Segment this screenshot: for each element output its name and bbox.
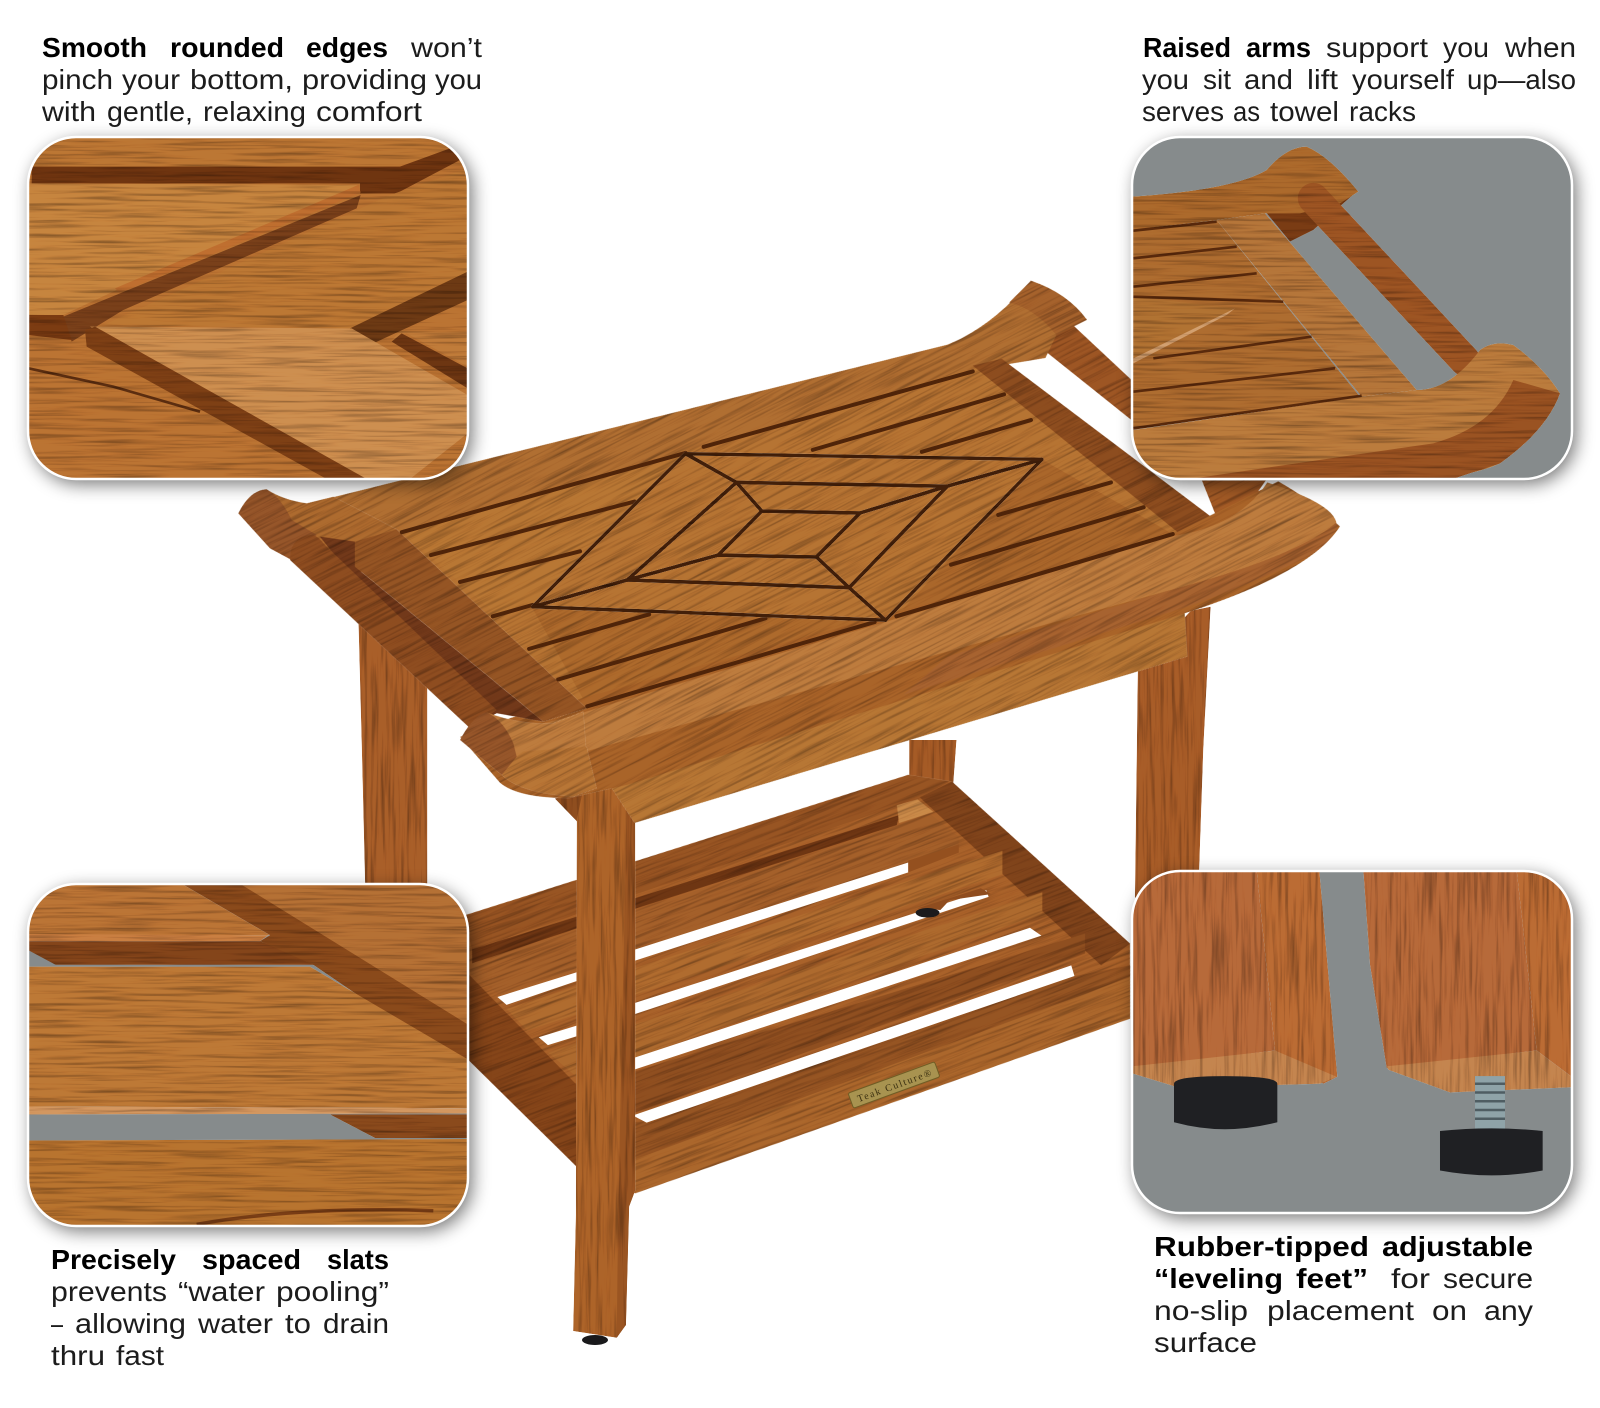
- panel: leveling feet close-up: [1132, 870, 1576, 1218]
- panel: spaced slats close-up: [28, 884, 472, 1231]
- text: precisely spaced slats: spaced: [202, 1244, 301, 1275]
- panel border: [1132, 871, 1572, 1213]
- right rubber foot: [1440, 1128, 1543, 1175]
- text: precisely spaced slats: “water: [178, 1276, 265, 1307]
- text: raised arms: towel: [1270, 96, 1339, 127]
- text: rubber-tipped feet: “leveling: [1154, 1263, 1283, 1294]
- text: smooth rounded edges: rounded: [170, 32, 284, 63]
- feet detail: [1132, 870, 1572, 1213]
- text: raised arms: lift: [1307, 64, 1338, 95]
- text: smooth rounded edges: edges: [306, 32, 388, 63]
- text: rubber-tipped feet: secure: [1443, 1263, 1533, 1294]
- arm detail: [1132, 137, 1572, 480]
- text: rubber-tipped feet: surface: [1154, 1327, 1257, 1358]
- panel shadow: [1136, 876, 1576, 1218]
- lower slatted shelf: [323, 552, 1270, 1408]
- text: precisely spaced slats: fast: [116, 1340, 164, 1371]
- text: raised arms: you: [1142, 64, 1189, 95]
- slat grooves: [402, 371, 1173, 706]
- front rail outer face: [460, 481, 1340, 798]
- panel: rounded edges close-up: [28, 137, 472, 484]
- text: smooth rounded edges: won’t: [410, 32, 482, 63]
- text: rubber-tipped feet: on: [1432, 1295, 1467, 1326]
- text: rubber-tipped feet: any: [1484, 1295, 1533, 1326]
- panel border: [1132, 137, 1572, 479]
- text: precisely spaced slats: pooling”: [276, 1276, 389, 1307]
- panel shadow: [32, 889, 472, 1231]
- front left arm end: [487, 712, 587, 763]
- bench legs: [358, 607, 1211, 898]
- text: precisely spaced slats: thru: [51, 1340, 105, 1371]
- slat detail: [28, 884, 468, 1227]
- text: precisely spaced slats: to: [285, 1308, 311, 1339]
- text: smooth rounded edges: providing: [302, 64, 427, 95]
- front foot: [582, 1335, 608, 1345]
- text: smooth rounded edges: comfort: [316, 96, 422, 127]
- panel shadow: [32, 142, 472, 484]
- text: precisely spaced slats: water: [197, 1308, 273, 1339]
- text: smooth rounded edges: your: [122, 64, 180, 95]
- back towel rod: [1042, 320, 1133, 421]
- panel shadow: [1136, 142, 1576, 484]
- text: raised arms: up—also: [1467, 64, 1576, 95]
- text: smooth rounded edges: pinch: [42, 64, 113, 95]
- slat field: [355, 366, 1202, 722]
- text: precisely spaced slats: –: [51, 1308, 63, 1339]
- text: rubber-tipped feet: placement: [1267, 1295, 1414, 1326]
- grey corner: [28, 950, 56, 965]
- text: smooth rounded edges: relaxing: [203, 96, 306, 127]
- shelf gaps: [497, 863, 1074, 1123]
- text: raised arms: as: [1233, 96, 1260, 127]
- left back arm: [238, 489, 397, 580]
- text: raised arms: Raised: [1143, 32, 1231, 63]
- right frame: [973, 359, 1216, 534]
- front rail top face: [511, 482, 1336, 768]
- back rail: [311, 281, 1087, 546]
- apron: [598, 595, 1187, 823]
- front leg: [555, 782, 635, 1338]
- threaded bolt: [1475, 1076, 1505, 1129]
- text: precisely spaced slats: allowing: [75, 1308, 186, 1339]
- text: smooth rounded edges: gentle,: [107, 96, 193, 127]
- panel border: [28, 137, 468, 479]
- text: raised arms: when: [1504, 32, 1576, 63]
- text: raised arms: sit: [1203, 64, 1231, 95]
- text: raised arms: you: [1443, 32, 1489, 63]
- wood detail: [28, 137, 468, 481]
- left frame: [355, 529, 587, 722]
- panel: raised arms close-up: [1132, 137, 1576, 484]
- text: precisely spaced slats: slats: [327, 1244, 389, 1275]
- text: rubber-tipped feet: for: [1391, 1263, 1430, 1294]
- left rod: [290, 535, 497, 728]
- text: precisely spaced slats: Precisely: [51, 1244, 176, 1275]
- text: precisely spaced slats: prevents: [51, 1276, 167, 1307]
- channel between rod and frame: [320, 537, 543, 728]
- text: rubber-tipped feet: Rubber-tipped: [1154, 1231, 1369, 1262]
- text: raised arms: racks: [1349, 96, 1416, 127]
- panel border: [28, 884, 468, 1226]
- text: rubber-tipped feet: adjustable: [1382, 1231, 1533, 1262]
- text: rubber-tipped feet: no-slip: [1154, 1295, 1248, 1326]
- text: smooth rounded edges: you: [435, 64, 482, 95]
- text: raised arms: and: [1244, 64, 1293, 95]
- text: precisely spaced slats: drain: [323, 1308, 389, 1339]
- rear leg stub seen through the slats: [908, 845, 991, 917]
- text: raised arms: yourself: [1352, 64, 1454, 95]
- text: smooth rounded edges: bottom,: [190, 64, 293, 95]
- text: raised arms: arms: [1246, 32, 1311, 63]
- text: smooth rounded edges: Smooth: [42, 32, 147, 63]
- left end of seat: [114, 344, 721, 942]
- brass plaque: [848, 1062, 940, 1108]
- diamond inlay: [533, 454, 1042, 620]
- text: raised arms: serves: [1142, 96, 1224, 127]
- text: smooth rounded edges: with: [41, 96, 96, 127]
- text: rubber-tipped feet: feet”: [1296, 1263, 1368, 1294]
- text: raised arms: support: [1326, 32, 1428, 63]
- left rubber foot: [1174, 1076, 1277, 1129]
- brass plaque: Teak Culture®: [856, 1068, 933, 1105]
